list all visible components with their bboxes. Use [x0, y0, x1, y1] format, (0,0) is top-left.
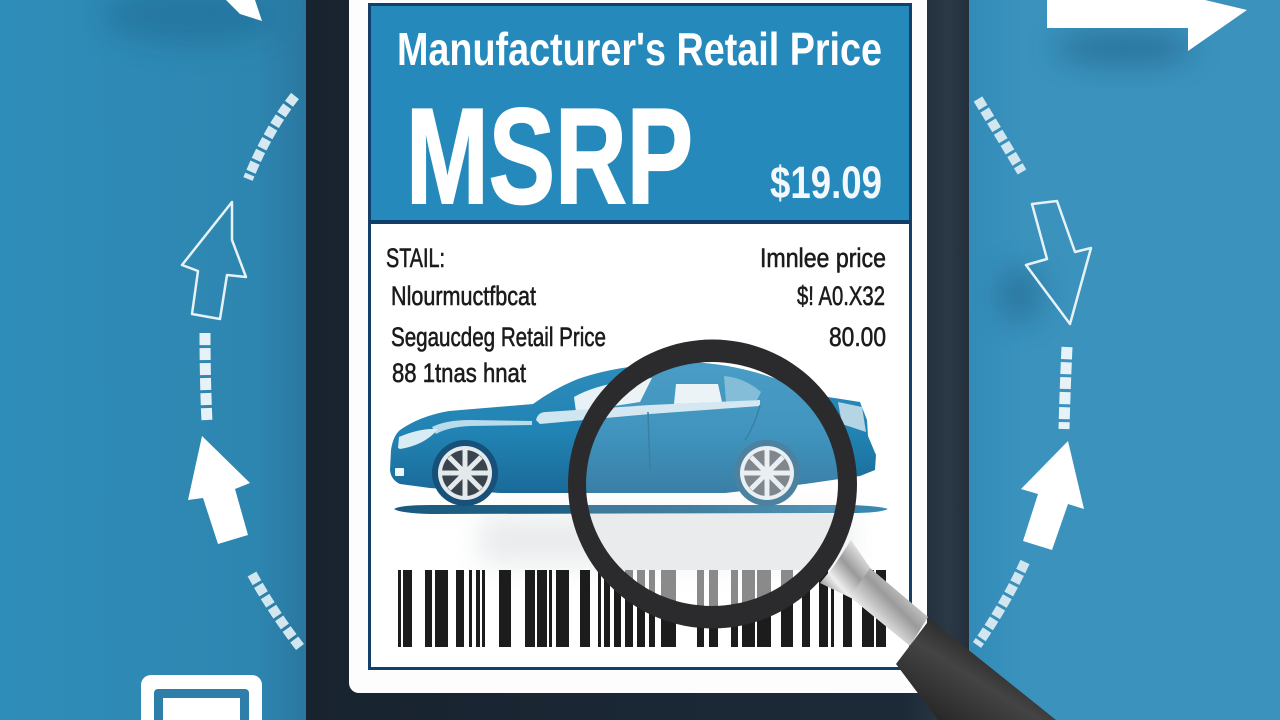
heading: MSRP: MSRP [406, 80, 693, 232]
hood crease [432, 420, 532, 434]
dashed arc: middle right [1064, 347, 1067, 429]
row 3 label: Segaucdeg Retail Price [391, 322, 606, 352]
shadow beside right outline arrow [998, 267, 1042, 323]
row 2 label: Nlourmuctfbcat [391, 281, 536, 311]
car illustration [390, 362, 876, 506]
rear window [674, 384, 722, 404]
dashed arc: upper left [248, 96, 295, 179]
heading: manufacturer's retail price: Manufacturer's Retail Price [397, 23, 882, 75]
lens tint and haze [585, 360, 841, 610]
shadow top left [100, 0, 280, 43]
ground line [394, 505, 888, 514]
magnifying glass [568, 340, 1056, 720]
handle grip [896, 619, 1056, 720]
fog lamp [395, 468, 404, 476]
label outline [370, 4, 910, 668]
belt line [536, 400, 760, 424]
dashed arc: lower left [252, 574, 300, 647]
row 1 label: STAIL: [386, 243, 445, 273]
price: header: $19.09 [770, 157, 882, 208]
phone frame [306, 0, 969, 720]
soft shadow under car [480, 516, 850, 564]
dashed arc: middle left [205, 333, 207, 422]
front wheel [432, 440, 498, 506]
panel: price label [370, 4, 910, 668]
row 2 value: $! A0.X32 [797, 281, 885, 311]
headlight [398, 429, 438, 449]
handle neck [820, 540, 871, 598]
dashed arc: lower right [977, 562, 1025, 645]
icon: arrow top left partial [226, 0, 262, 21]
row 4 label: 88 1tnas hnat [392, 358, 526, 388]
door line [648, 405, 760, 470]
arrow: left outline [182, 202, 246, 319]
tail lights [838, 402, 866, 432]
row 1 value: Imnlee price [760, 243, 886, 273]
barcode [398, 570, 886, 647]
rear quarter window [724, 376, 761, 402]
dashed arc: upper right [978, 99, 1022, 172]
arrow: right solid [1021, 441, 1084, 550]
arrow: right outline [1026, 201, 1091, 324]
row 3 value: 80.00 [829, 322, 886, 352]
paper sheet [349, 0, 927, 693]
arrow: left solid [188, 436, 250, 544]
front window [574, 378, 652, 412]
panel: blue header [371, 6, 909, 232]
text block: spec rows [386, 243, 886, 388]
rear wheel [734, 440, 800, 506]
handle chrome tube [850, 568, 928, 646]
car body [390, 362, 876, 493]
shadow under top right arrow [1055, 30, 1195, 66]
icon: bottom left device [141, 675, 262, 720]
arrow: top right solid [1047, 0, 1247, 51]
lens ring [568, 340, 857, 628]
